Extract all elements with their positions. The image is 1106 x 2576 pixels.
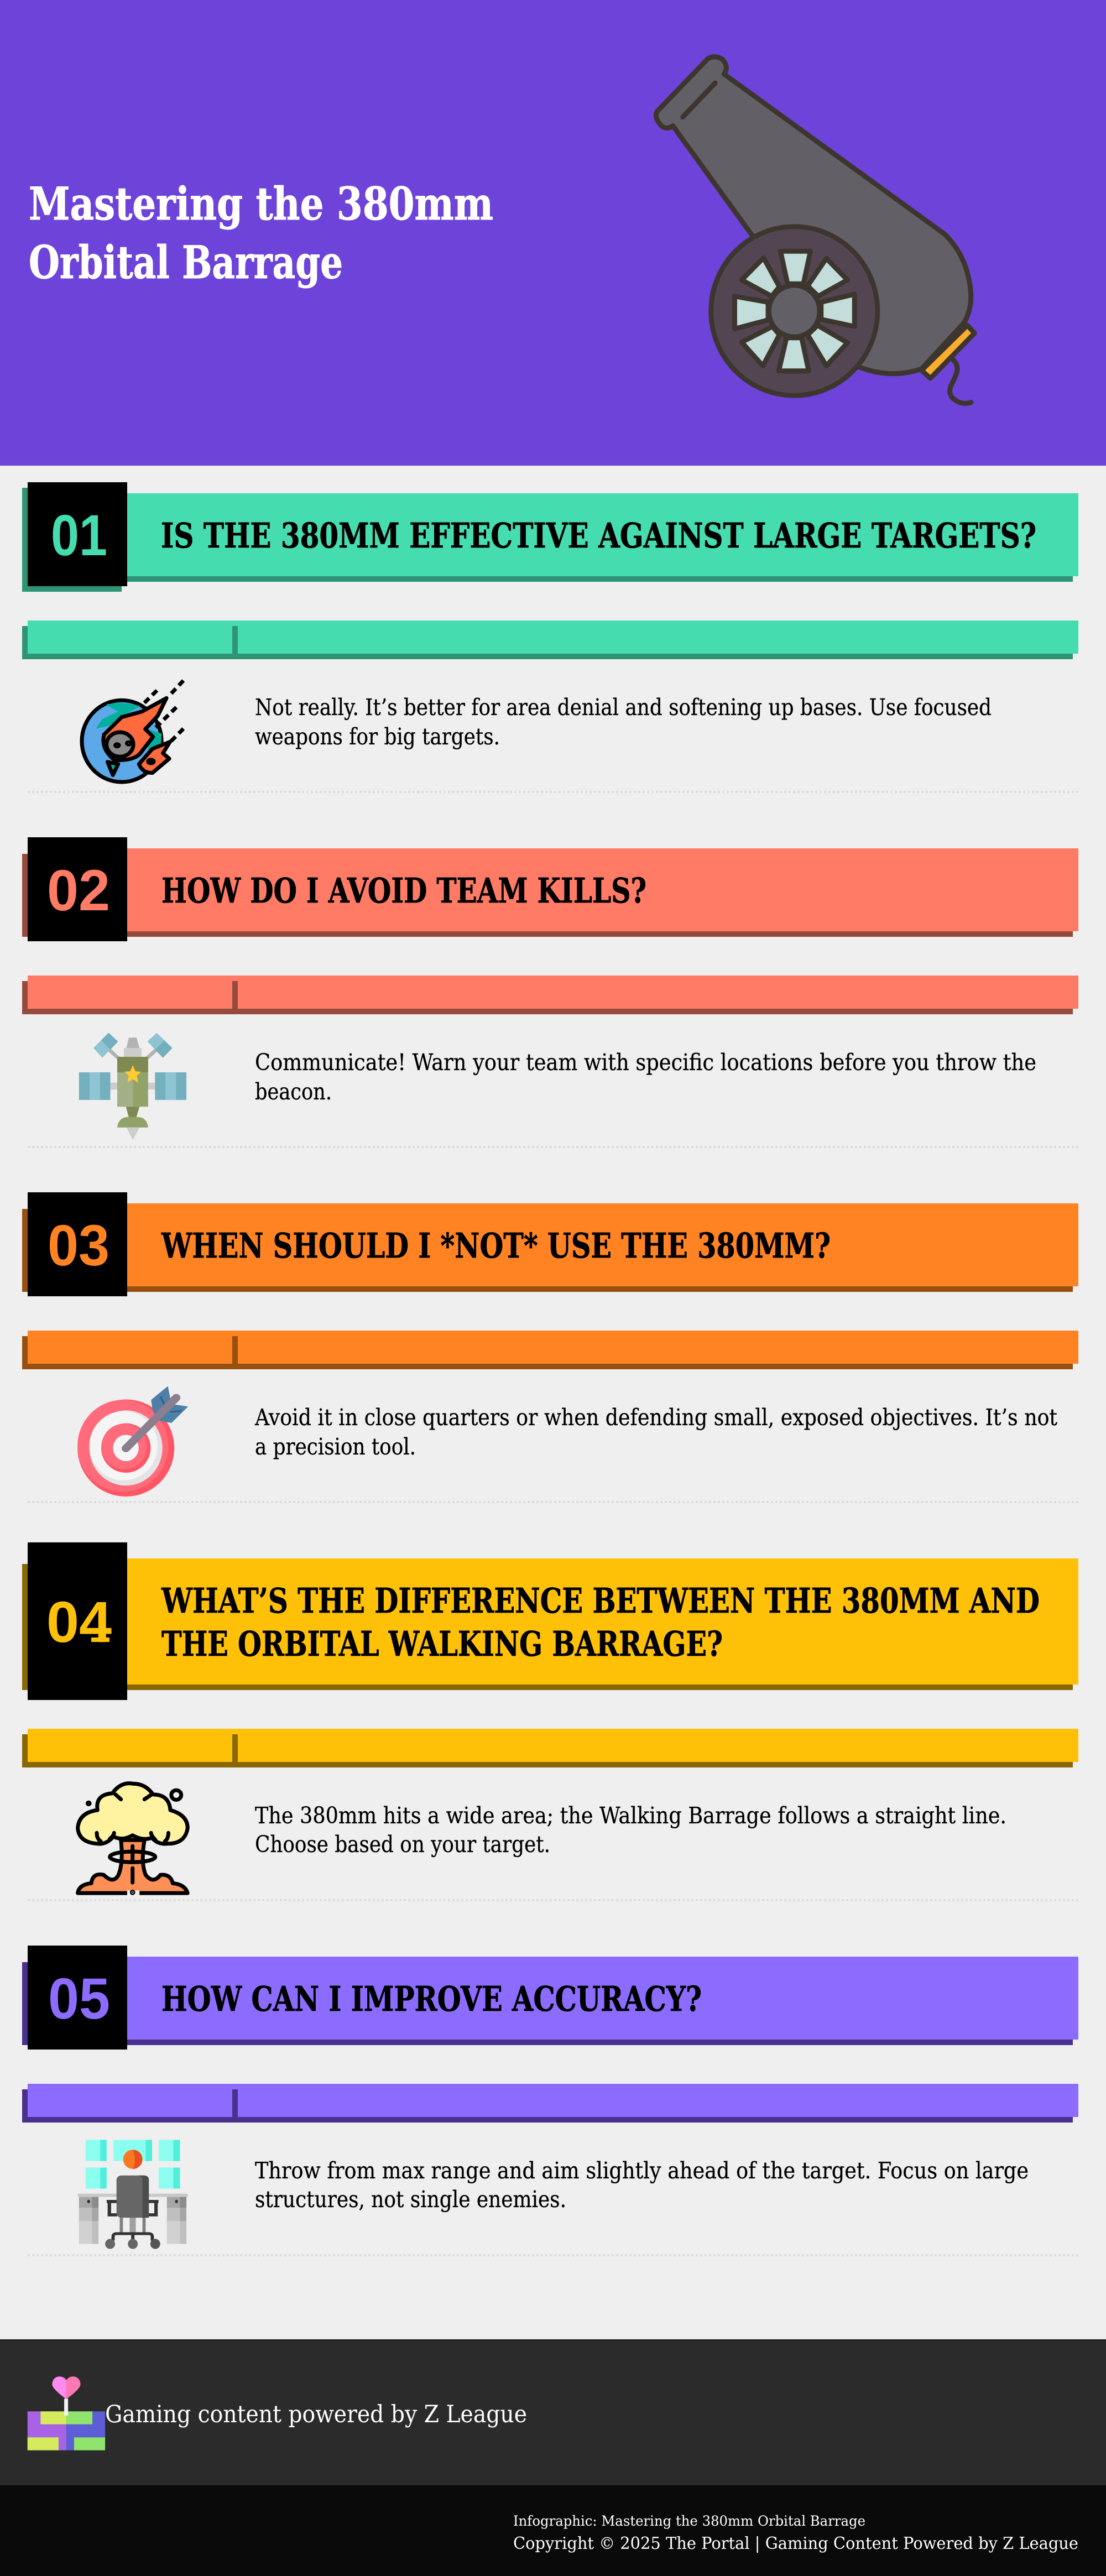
heading bar 03 — [127, 1203, 1078, 1292]
icon: target with arrow — [77, 1386, 188, 1496]
answer text 02 — [255, 1049, 1036, 1105]
heading bar 04 — [127, 1558, 1078, 1690]
answer header bar 01 — [22, 620, 1078, 659]
answer header bar 05 — [22, 2084, 1078, 2123]
panel: question 2 — [22, 837, 1078, 1147]
answer header bar 02 — [22, 976, 1078, 1014]
number block 01 — [22, 482, 127, 592]
title — [29, 178, 493, 289]
heading bar 02: HOW DO I AVOID TEAM KILLS? — [161, 870, 646, 911]
answer header bar 04 — [22, 1729, 1078, 1767]
answer text 05: Throw from max range and aim slightly ahead of the target. Focus on large — [255, 2157, 1029, 2184]
title: Orbital Barrage — [29, 237, 343, 289]
icon: Z League logo — [28, 2376, 105, 2450]
icon: mushroom cloud — [78, 1784, 187, 1895]
answer header bar 03 — [22, 1331, 1078, 1369]
panel: question 3 — [22, 1192, 1078, 1502]
heading bar 05: HOW CAN I IMPROVE ACCURACY? — [161, 1979, 702, 2019]
answer text 01 — [255, 694, 992, 750]
icon: meteors hitting planet — [82, 681, 184, 782]
number block 05: 05 — [48, 1967, 110, 2031]
answer text 04: Choose based on your target. — [255, 1831, 550, 1858]
number block 03: 03 — [48, 1213, 109, 1278]
answer text 03 — [254, 1404, 1057, 1460]
panel: question 4 — [22, 1542, 1078, 1900]
answer text 01: Not really. It’s better for area denial and softening up bases. Use focused — [255, 694, 992, 721]
heading bar 02 — [127, 848, 1078, 937]
infographic caption: Infographic: Mastering the 380mm Orbital Barrage — [513, 2513, 865, 2529]
panel: copyright footer — [0, 2485, 1106, 2576]
heading bar 05 — [127, 1957, 1078, 2045]
number block 03 — [22, 1192, 127, 1296]
number block 02: 02 — [47, 858, 110, 923]
number block 01: 01 — [51, 503, 107, 568]
panel: question 5 — [22, 1946, 1078, 2255]
panel: question 1 — [22, 482, 1078, 792]
answer text 05 — [255, 2157, 1029, 2213]
number block 04: 04 — [46, 1590, 112, 1655]
answer text 02: Communicate! Warn your team with specific locations before you throw the — [255, 1049, 1036, 1076]
answer text 05: structures, not single enemies. — [255, 2186, 566, 2213]
answer text 01: weapons for big targets. — [255, 723, 500, 750]
answer text 03: a precision tool. — [255, 1433, 416, 1460]
panel: sponsor footer — [0, 2339, 1106, 2485]
heading bar 01 — [127, 493, 1078, 582]
answer text 02: beacon. — [255, 1078, 332, 1105]
icon: satellite — [79, 1033, 186, 1140]
number block 02 — [22, 837, 127, 941]
heading bar 03: WHEN SHOULD I *NOT* USE THE 380MM? — [161, 1226, 831, 1266]
answer text 04 — [255, 1802, 1006, 1858]
icon: player at desk with screens — [78, 2140, 188, 2249]
title: Mastering the 380mm — [29, 178, 493, 231]
number block 04 — [22, 1542, 127, 1700]
number block 05 — [22, 1946, 127, 2050]
panel: header — [0, 0, 1106, 466]
sponsor text: Gaming content powered by Z League — [105, 2401, 527, 2428]
copyright line: Copyright © 2025 The Portal | Gaming Content Powered by Z League — [513, 2534, 1078, 2553]
icon: cannon — [656, 57, 974, 403]
answer text 04: The 380mm hits a wide area; the Walking Barrage follows a straight line. — [255, 1802, 1006, 1829]
heading bar 04: THE ORBITAL WALKING BARRAGE? — [161, 1624, 723, 1664]
